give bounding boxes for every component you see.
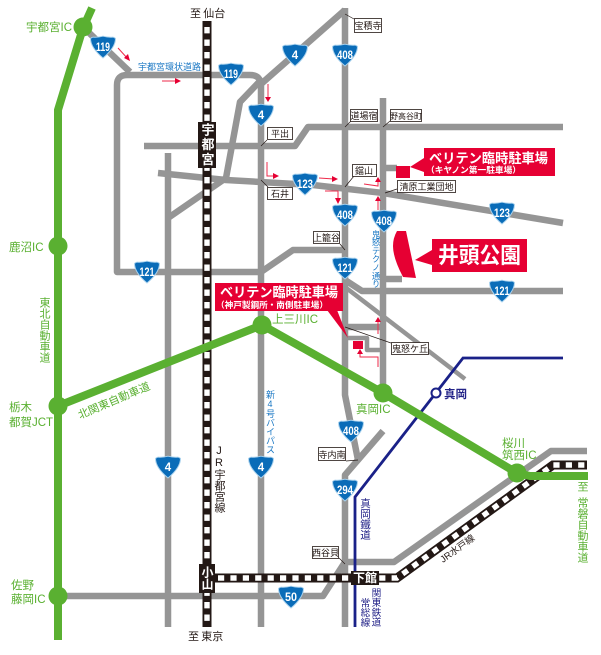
railway and direction names bbox=[188, 6, 478, 643]
interchange names: 宇都宮IC bbox=[26, 21, 72, 34]
road names: 宇都宮環状道路 bbox=[138, 61, 201, 72]
parking callout: Canon No.1: ベリテン臨時駐車場 bbox=[429, 150, 548, 166]
route shields: 4 bbox=[258, 110, 265, 122]
route shields: 4 bbox=[292, 50, 299, 62]
route shields: 408 bbox=[337, 50, 354, 62]
expressway names: 東北自動車道 bbox=[38, 297, 50, 363]
route shields: 294 bbox=[337, 485, 354, 497]
railway: JR Utsunomiya line bbox=[202, 21, 212, 627]
road names: 新4号バイパス bbox=[265, 390, 275, 454]
place name labels: 野高谷町 bbox=[390, 111, 422, 121]
park marker and label: Igashira Park bbox=[393, 231, 527, 278]
place name labels: 寺内南 bbox=[318, 449, 346, 460]
place name labels: 石井 bbox=[271, 188, 289, 199]
place name labels: 西谷貝 bbox=[312, 548, 339, 558]
expressway: Tohoku bbox=[58, 8, 92, 640]
station label: Oyama: 小山 bbox=[200, 566, 214, 590]
route shields: 121 bbox=[494, 286, 510, 298]
road names: 鬼怒テクノ通り bbox=[371, 229, 381, 288]
route shields: 408 bbox=[343, 426, 360, 438]
park marker and label: Igashira Park: 井頭公園 bbox=[438, 243, 521, 268]
station: Moka bbox=[432, 387, 467, 401]
expressway: Kita-Kanto bbox=[58, 325, 588, 476]
route shields: 4 bbox=[165, 462, 172, 474]
route shields: 4 bbox=[258, 462, 265, 474]
station: Moka: 真岡 bbox=[444, 387, 467, 401]
interchange names: 佐野 bbox=[11, 578, 34, 592]
railway: JR Mito line bbox=[207, 465, 587, 578]
station label: Shimodate: 下館 bbox=[353, 571, 377, 585]
place name labels: 清原工業団地 bbox=[399, 181, 454, 192]
railway and direction names: 至 東京 bbox=[188, 630, 223, 643]
route shields: 123 bbox=[494, 208, 510, 220]
railway and direction names: 関東鉄道 bbox=[370, 588, 381, 627]
place name labels: 上籠谷 bbox=[313, 232, 340, 243]
red route arrows bbox=[118, 48, 381, 367]
parking callout: Kobe Steel south: ベリテン臨時駐車場 bbox=[220, 284, 338, 300]
interchange names bbox=[9, 21, 536, 606]
route shields: 121 bbox=[140, 267, 155, 279]
railway and direction names: JR宇都宮線 bbox=[213, 445, 226, 513]
route shields: 119 bbox=[224, 69, 238, 81]
route shields bbox=[90, 36, 514, 608]
railway and direction names: 常総線 bbox=[358, 597, 370, 628]
route shields: 119 bbox=[96, 42, 110, 54]
interchange names: 筑西IC bbox=[502, 448, 536, 462]
place name labels: 平出 bbox=[271, 128, 289, 139]
interchange names: 桜川 bbox=[502, 436, 525, 450]
road names bbox=[138, 61, 381, 454]
interchange names: 上三川IC bbox=[272, 313, 318, 326]
railway and direction names: JR水戸線 bbox=[438, 532, 478, 565]
interchange names: 都賀JCT bbox=[9, 416, 53, 429]
parking callout: Canon No.1: （キヤノン第一駐車場） bbox=[426, 165, 521, 175]
place name labels bbox=[261, 14, 456, 564]
parking callout: Kobe Steel south: （神戸製鋼所・南側駐車場） bbox=[216, 300, 328, 310]
railway and direction names: 至 仙台 bbox=[190, 6, 225, 20]
route shields: 123 bbox=[297, 179, 313, 191]
expressway names: 北関東自動車道 bbox=[76, 379, 152, 422]
railway and direction names: 真岡鐵道 bbox=[359, 497, 371, 540]
interchange markers bbox=[48, 18, 526, 606]
expressway names: 常磐自動車道 bbox=[576, 497, 588, 563]
railway: Moka line bbox=[355, 358, 563, 627]
expressway names bbox=[38, 297, 588, 563]
interchange names: 藤岡IC bbox=[11, 593, 46, 606]
parking callout: Canon No.1 bbox=[396, 148, 555, 178]
parking callout: Kobe Steel south bbox=[215, 283, 363, 349]
place name labels: 鬼怒ケ丘 bbox=[392, 343, 428, 354]
route shields: 121 bbox=[338, 263, 353, 275]
interchange names: 栃木 bbox=[9, 400, 32, 414]
route shields: 408 bbox=[337, 210, 354, 222]
interchange names: 鹿沼IC bbox=[9, 240, 44, 254]
station label: Utsunomiya: 宇都宮 bbox=[200, 123, 214, 167]
place name labels: 宝積寺 bbox=[354, 20, 382, 31]
expressway names: 至 bbox=[576, 481, 588, 492]
route shields: 50 bbox=[285, 592, 297, 604]
place name labels: 鐺山 bbox=[355, 166, 373, 176]
place name labels: 道場宿 bbox=[350, 110, 378, 121]
interchange names: 真岡IC bbox=[356, 402, 390, 416]
route shields: 408 bbox=[376, 216, 393, 228]
